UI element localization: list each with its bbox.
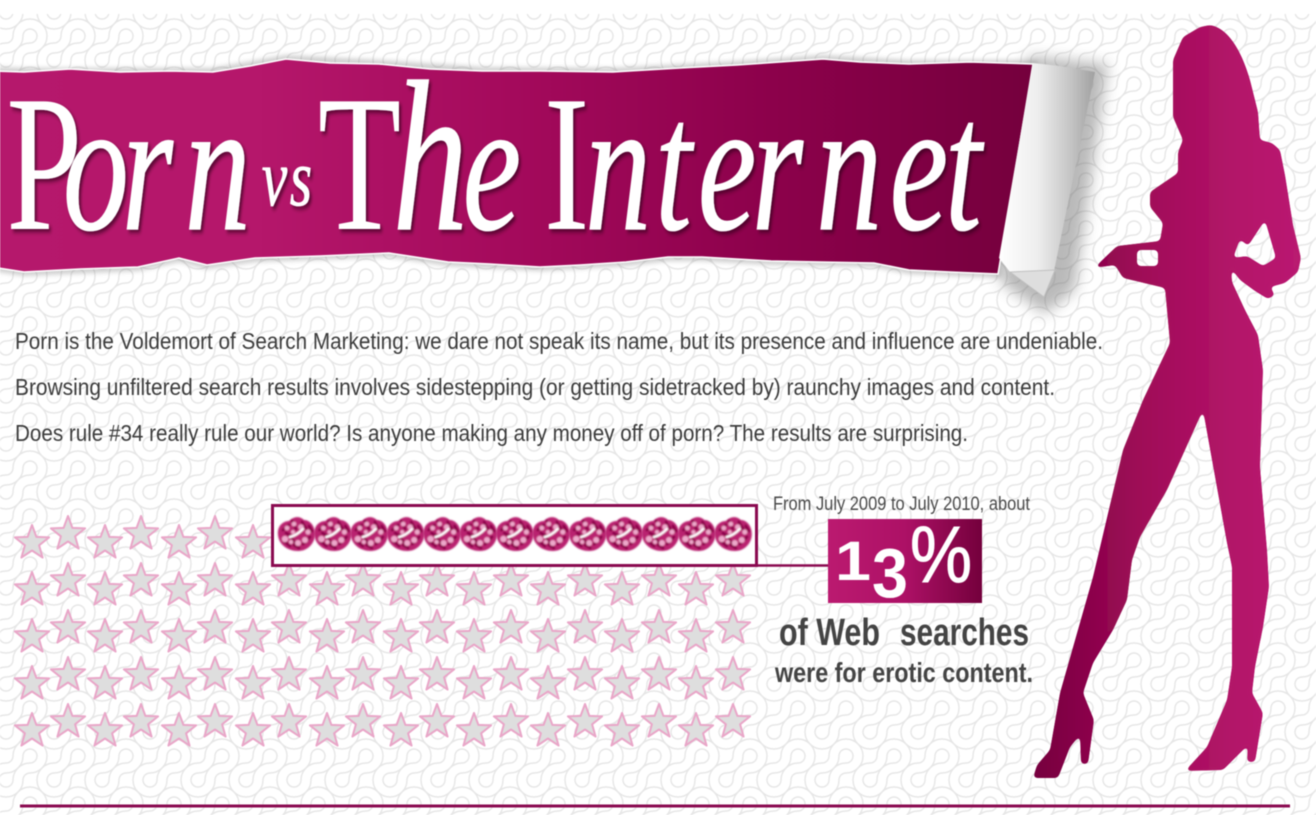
13 percent value <box>835 510 972 612</box>
banner shape <box>0 59 1033 274</box>
erotic content caption: were for erotic content. <box>774 657 1033 688</box>
title: I <box>544 56 589 272</box>
woman silhouette <box>1033 25 1301 778</box>
highlighted frame with 13 lip icons <box>272 506 756 566</box>
of web searches <box>779 612 1029 654</box>
13 percent value: 1 <box>835 529 871 592</box>
intro caption: From July 2009 to July 2010, about <box>773 494 1031 515</box>
intro paragraph: Browsing unfiltered search results involves sidestepping (or getting sidetracked by) raunchy images and content. <box>15 374 1055 400</box>
connector line <box>756 564 830 567</box>
paper curl <box>999 63 1095 297</box>
title: h <box>393 39 468 277</box>
intro paragraph: Does rule #34 really rule our world? Is anyone making any money off of porn? The results are surprising. <box>15 420 968 446</box>
title: vs <box>262 133 312 224</box>
title: e <box>463 62 521 271</box>
title: nternet <box>585 62 985 271</box>
intro paragraph <box>15 328 1103 446</box>
13 percent box <box>828 519 982 603</box>
torn edge shadow <box>0 59 1033 274</box>
of web searches: searches <box>900 612 1029 654</box>
title: T <box>318 56 401 272</box>
torn paper banner <box>0 38 1108 314</box>
title: P <box>6 56 82 272</box>
statistic callout <box>773 494 1033 688</box>
pictogram chart: stars <box>15 516 750 746</box>
bottom rule <box>20 804 1290 808</box>
13 percent value: % <box>910 510 972 599</box>
13 percent value: 3 <box>872 534 908 612</box>
title: orn <box>63 62 251 271</box>
curl shadow <box>1000 56 1108 314</box>
of web searches: of Web <box>779 612 880 654</box>
intro paragraph: Porn is the Voldemort of Search Marketing: we dare not speak its name, but its presence and influence are undeniable. <box>15 328 1103 354</box>
